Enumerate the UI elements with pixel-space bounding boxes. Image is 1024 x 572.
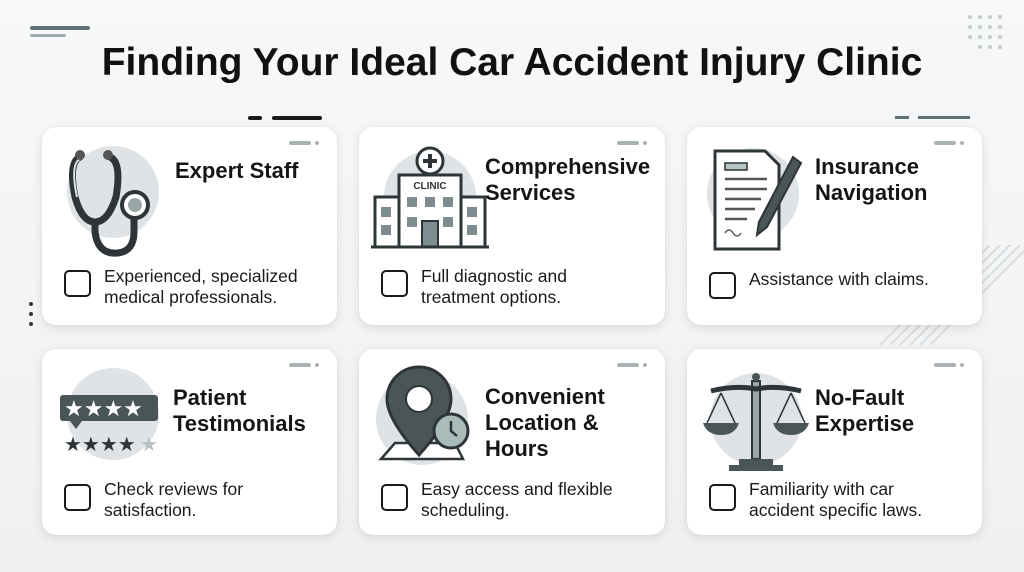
checkbox bbox=[381, 270, 408, 297]
heading: Hours bbox=[485, 436, 549, 461]
description: Easy access and flexible bbox=[421, 479, 613, 499]
heading: No-Fault bbox=[815, 385, 904, 410]
panel: Patient Testimonials bbox=[42, 349, 337, 535]
title underline dashes bbox=[248, 116, 262, 120]
left dots bbox=[29, 302, 33, 326]
heading bbox=[815, 385, 914, 436]
panel: Convenient Location & Hours bbox=[359, 349, 665, 535]
panel: Comprehensive Services bbox=[359, 127, 665, 325]
icon: document and pen bbox=[707, 148, 802, 250]
description: treatment options. bbox=[421, 287, 561, 307]
description: Experienced, specialized bbox=[104, 266, 298, 286]
checkbox bbox=[381, 484, 408, 511]
checkbox bbox=[64, 484, 91, 511]
icon: star ratings: ★ bbox=[140, 432, 158, 456]
title: Finding Your Ideal Car Accident Injury Clinic bbox=[102, 41, 922, 84]
description bbox=[104, 479, 243, 520]
panel: No-Fault Expertise bbox=[687, 349, 982, 535]
heading: Comprehensive bbox=[485, 154, 650, 179]
icon: star ratings: ★★★★ bbox=[64, 432, 136, 456]
description: Check reviews for bbox=[104, 479, 243, 499]
description: Familiarity with car bbox=[749, 479, 894, 499]
icon: clinic building: CLINIC bbox=[413, 181, 447, 192]
heading: Location & bbox=[485, 410, 599, 435]
description: Assistance with claims. bbox=[749, 269, 929, 289]
heading: Navigation bbox=[815, 180, 927, 205]
description bbox=[749, 479, 922, 520]
decorative top-left lines bbox=[30, 26, 90, 30]
heading: Insurance bbox=[815, 154, 919, 179]
decorative dot grid bbox=[968, 15, 1002, 49]
panel: Expert Staff bbox=[42, 127, 337, 325]
icon: scales of justice bbox=[703, 373, 809, 471]
description: satisfaction. bbox=[104, 500, 196, 520]
heading bbox=[485, 154, 650, 205]
checkbox bbox=[64, 270, 91, 297]
icon: map pin and clock bbox=[376, 366, 470, 465]
heading: Patient bbox=[173, 385, 246, 410]
checkbox bbox=[709, 484, 736, 511]
heading: Expertise bbox=[815, 411, 914, 436]
description: Full diagnostic and bbox=[421, 266, 567, 286]
hatch decoration bbox=[880, 245, 1024, 345]
description bbox=[421, 479, 613, 520]
heading bbox=[173, 385, 306, 436]
heading: Expert Staff bbox=[175, 158, 298, 183]
description: accident specific laws. bbox=[749, 500, 922, 520]
icon: star ratings: ★★★★ bbox=[64, 397, 143, 422]
checkbox bbox=[709, 272, 736, 299]
description: medical professionals. bbox=[104, 287, 277, 307]
icon: star ratings bbox=[60, 368, 159, 460]
panel: Insurance Navigation bbox=[687, 127, 982, 325]
icon: clinic building bbox=[371, 146, 489, 248]
icon: stethoscope bbox=[67, 146, 159, 257]
heading bbox=[815, 154, 927, 205]
heading: Testimonials bbox=[173, 411, 306, 436]
description: scheduling. bbox=[421, 500, 510, 520]
description bbox=[421, 266, 567, 307]
heading: Convenient bbox=[485, 384, 605, 409]
heading: Services bbox=[485, 180, 576, 205]
description bbox=[104, 266, 298, 307]
heading bbox=[485, 384, 605, 461]
